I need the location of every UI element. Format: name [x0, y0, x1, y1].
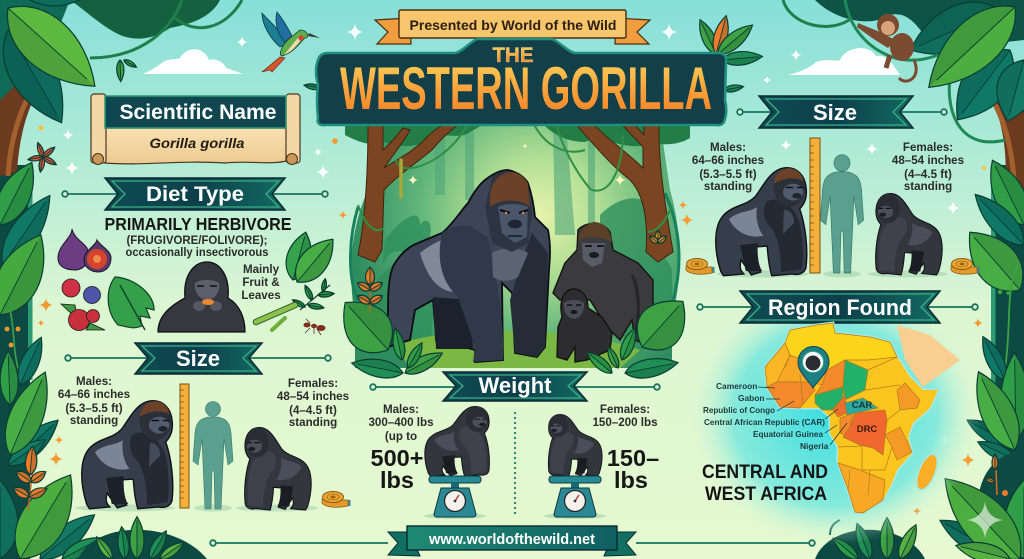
vines [90, 0, 242, 58]
diet text: occasionally insectivorous [126, 247, 268, 259]
clouds [143, 48, 900, 75]
heading ribbon: Size [176, 346, 220, 371]
height ruler [810, 138, 820, 273]
baby gorilla [557, 289, 612, 362]
diet text: PRIMARILY HERBIVORE [104, 214, 292, 234]
panel: diet type [58, 178, 343, 335]
male label [58, 375, 130, 427]
icon: orange leaf plant [11, 446, 49, 510]
adult female gorilla [553, 222, 653, 343]
icon: berries [61, 279, 105, 330]
icon: bamboo shoots [256, 305, 295, 330]
female gorilla on scale [544, 414, 606, 519]
grass ground [395, 331, 640, 368]
country labels: Nigeria [800, 441, 829, 451]
male weight text [368, 403, 434, 493]
diet text: (FRUGIVORE/FOLIVORE); [126, 235, 268, 247]
heading ribbon: Size [813, 100, 857, 125]
heading ribbon: Weight [478, 373, 552, 398]
icon: gorilla eating [158, 262, 245, 332]
male label [692, 141, 764, 193]
ground shadows [75, 504, 318, 512]
front arm [440, 225, 503, 362]
panel: region found [690, 285, 980, 545]
female label [277, 377, 349, 429]
main silverback gorilla [388, 170, 550, 362]
icon: figs [58, 229, 111, 272]
madagascar [912, 451, 942, 493]
heading: Scientific Name [120, 101, 276, 124]
connector with end dots [62, 191, 328, 197]
male weight text: Males: [383, 403, 419, 416]
region text [702, 462, 828, 505]
female weight text: 150– [607, 445, 659, 471]
region text: WEST AFRICA [705, 484, 827, 505]
human silhouette [820, 155, 864, 273]
female label: Females: [288, 377, 338, 390]
plaque side leaves [304, 14, 763, 93]
heading ribbon [443, 372, 587, 401]
head [485, 171, 532, 252]
male gorilla [82, 401, 173, 509]
title text: western gorilla: WESTERN GORILLA [340, 55, 712, 122]
mainly fruit and leaves text: Mainly [243, 263, 280, 276]
height ruler [180, 384, 189, 508]
right jungle border [783, 0, 1024, 559]
male label: (5.3–5.5 ft) [65, 402, 123, 415]
icon: star watermark [967, 502, 1003, 538]
forest background bushes [355, 198, 672, 350]
decorative sparkles [62, 24, 960, 445]
far arm [510, 233, 548, 357]
country labels: Central African Republic (CAR) [704, 417, 825, 427]
male gorilla on scale [424, 406, 489, 519]
mainly fruit and leaves text: Fruit & [242, 276, 280, 289]
silver saddle [420, 238, 456, 292]
female weight text: Females: [600, 403, 650, 416]
male label: standing [70, 414, 118, 427]
icon: orange sprig [984, 454, 1008, 496]
female label: 48–54 inches [277, 390, 349, 403]
species name: Gorilla gorilla [150, 135, 245, 151]
male label: 64–66 inches [692, 154, 764, 167]
icon: red flower [27, 142, 58, 173]
male weight text: 500+ [371, 445, 423, 471]
monkey icon [845, 0, 938, 81]
female gorilla [245, 428, 311, 510]
right tree [572, 120, 673, 262]
icon: twig [291, 278, 334, 310]
heading ribbon: Diet Type [146, 183, 244, 206]
panel: central forest scene [329, 120, 700, 382]
diet text [104, 214, 292, 259]
country labels: Gabon [738, 393, 765, 403]
title text: the: THE [492, 44, 534, 67]
female label [892, 141, 964, 193]
ground shadows [717, 270, 948, 278]
human silhouette [193, 402, 233, 509]
connector with end dots [370, 384, 660, 390]
female weight text: lbs [614, 467, 648, 493]
arabian peninsula [897, 325, 960, 387]
vines [358, 120, 672, 232]
male label: standing [704, 180, 752, 193]
mainly fruit and leaves text: Leaves [241, 289, 281, 302]
heading ribbon [740, 291, 940, 323]
icon: measuring tape right [951, 258, 980, 274]
female label: standing [289, 416, 337, 429]
panel: weight [368, 372, 660, 519]
arch border [350, 193, 679, 300]
footer url banner [210, 526, 815, 556]
panel: size left [58, 343, 350, 512]
icon: orange flower [648, 230, 668, 245]
panel: scientific name [91, 94, 300, 164]
left tree [358, 120, 466, 262]
heading ribbon [135, 343, 262, 374]
chest [492, 248, 528, 281]
female weight text: 150–200 lbs [592, 416, 658, 429]
country labels [703, 381, 877, 451]
hind leg [433, 297, 473, 348]
connector with end dots [65, 355, 331, 361]
heading ribbon [105, 178, 285, 210]
male label: 64–66 inches [58, 388, 130, 401]
scene foliage [329, 230, 700, 382]
country labels: DRC [857, 424, 877, 435]
canopy top [70, 0, 220, 39]
connector with end dots [697, 304, 978, 310]
icon: monstera leaf [108, 277, 154, 330]
male weight text: (up to [385, 430, 417, 443]
country labels: CAR [852, 400, 872, 411]
title plaque [316, 39, 726, 125]
male label: (5.3–5.5 ft) [699, 168, 757, 181]
female label: standing [904, 180, 952, 193]
forest background trunks [435, 125, 595, 235]
female label: (4–4.5 ft) [289, 404, 337, 417]
icon: measuring tape [322, 492, 350, 507]
male label: Males: [76, 375, 112, 388]
country labels: Cameroon [716, 381, 757, 391]
heading ribbon [759, 96, 913, 128]
presented-by banner: Presented by World of the Wild [410, 17, 616, 33]
icon: ant [304, 319, 326, 335]
location pin [798, 346, 829, 388]
female gorilla [876, 194, 942, 275]
icon: measuring tape left [686, 258, 714, 274]
region text: CENTRAL AND [702, 462, 828, 483]
female label: (4–4.5 ft) [904, 168, 952, 181]
female label: 48–54 inches [892, 154, 964, 167]
presented-by banner [375, 10, 650, 44]
female label: Females: [903, 141, 953, 154]
male weight text: 300–400 lbs [368, 416, 434, 429]
male gorilla [716, 168, 807, 276]
country labels: Republic of Congo [703, 405, 775, 415]
map glow [690, 285, 980, 545]
icon: leaves [281, 229, 343, 291]
male weight text: lbs [380, 467, 414, 493]
country labels: Equatorial Guinea [753, 429, 823, 439]
female weight text [592, 403, 659, 493]
panel: size right [686, 96, 980, 278]
left jungle border [0, 0, 242, 559]
canopy top [815, 0, 1024, 50]
icon: orange plant [356, 267, 384, 312]
map: africa [765, 323, 938, 513]
footer url banner: www.worldofthewild.net [428, 531, 595, 548]
hummingbird icon [262, 12, 320, 72]
canopy [345, 123, 690, 146]
heading ribbon: Region Found [768, 295, 912, 320]
glow sparkles [408, 143, 626, 186]
divider [514, 412, 516, 514]
connector with end dots [737, 109, 947, 115]
male label: Males: [710, 141, 746, 154]
mainly fruit and leaves text [241, 263, 281, 302]
